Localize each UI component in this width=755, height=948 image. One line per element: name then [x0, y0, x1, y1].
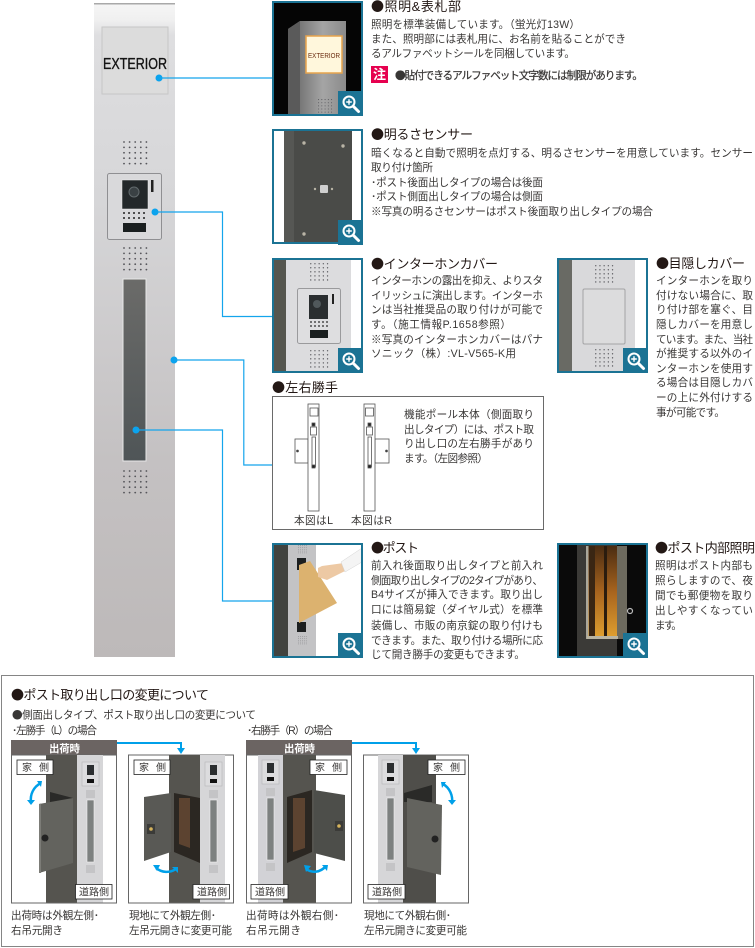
text: intercom cover: イリッシュに演出します。インターホ [371, 289, 543, 302]
text: post internal lighting: 照明はポスト内部も [655, 559, 753, 572]
text: blind cover: が推奨する以外のイ [656, 347, 753, 360]
photo: lighting: EXTERIOR [308, 51, 340, 60]
zoom icon [623, 633, 648, 658]
right-hand label: ･右勝手（R）の場合 [247, 724, 333, 737]
caption: shipping right: 出荷時は外観右側･ [246, 909, 339, 922]
text: lighting: また、照明部には表札用に、お名前を貼ることができ [371, 32, 626, 46]
text: lighting: 照明を標準装備しています。（蛍光灯13W） [371, 18, 580, 31]
text: intercom cover: ンは当社推奨品の取り付けが可能で [371, 303, 543, 316]
text: post internal lighting: 出しやすくなってい [655, 605, 753, 617]
text: brightness sensor [371, 124, 753, 218]
text: intercom cover: ※写真のインターホンカバーはパナ [371, 333, 543, 346]
caption: changed right [364, 909, 467, 937]
icon: swing arrow [443, 784, 452, 803]
mail slot [123, 279, 146, 461]
photo: blind cover [558, 259, 648, 373]
leader: intercom cover [152, 208, 272, 316]
nameplate: EXTERIOR [103, 56, 167, 73]
diagram: shipping left [12, 755, 116, 903]
diagram: R [364, 404, 389, 511]
text: intercom cover: す。（施工情報P.1658参照） [371, 318, 511, 331]
caption: changed left: 現地にて外観左側･ [129, 909, 216, 922]
diagram: shipping left: 道路側 [79, 886, 109, 898]
photo: post [273, 544, 363, 658]
photo: lighting [273, 2, 363, 116]
diagram: changed left: 道路側 [197, 886, 227, 898]
nameplate [102, 27, 168, 94]
text: brightness sensor: ･ポスト後面出しタイプの場合は後面 [371, 176, 543, 189]
text: brightness sensor: ･ポスト側面出しタイプの場合は側面 [371, 190, 543, 203]
header: shipping R [246, 740, 352, 755]
text: post [371, 538, 543, 661]
subheading: ●側面出しタイプ、ポスト取り出し口の変更について [12, 708, 256, 722]
text: lighting [371, 0, 626, 60]
text: blind cover: ンターホンを使用す [656, 362, 753, 375]
text: post: ●ポスト [371, 538, 419, 556]
diagram: L [295, 404, 319, 511]
diagram: shipping right: 道路側 [255, 886, 285, 898]
caption: changed right: 現地にて外観右側･ [364, 909, 451, 922]
diagram: shipping right: 家 側 [315, 761, 342, 774]
panel: changing the post outlet [2, 676, 754, 946]
leader: post [132, 426, 272, 601]
leader: handedness [170, 356, 272, 465]
diagram: changed right [364, 755, 468, 903]
header: shipping L: 出荷時 [49, 742, 80, 755]
text: post: 装備し、市販の南京錠の取り付けも [371, 619, 543, 632]
heading: handedness: ●左右勝手 [272, 377, 338, 396]
arrow: R change [352, 743, 420, 754]
text: post: 口には簡易錠（ダイヤル式）を標準 [371, 603, 543, 616]
header: shipping L [11, 740, 117, 755]
panel: handedness: り出し口の左右勝手があり [404, 437, 534, 450]
text: intercom cover: ソニック（株）:VL-V565-K用 [371, 347, 516, 360]
panel: handedness: 本図はL [294, 514, 333, 527]
pole illustration [94, 3, 175, 657]
caption: shipping right [246, 909, 339, 937]
caption: changed left: 左吊元開きに変更可能 [129, 924, 232, 937]
caption: changed left [129, 909, 232, 937]
text: blind cover: る場合は目隠しカバ [656, 376, 753, 389]
text: blind cover: ーの上に外付けする [656, 391, 753, 404]
text: brightness sensor: 取り付け箇所 [371, 161, 433, 174]
left-hand label: ･左勝手（L）の場合 [12, 724, 97, 737]
caption: shipping left: 右吊元開き [11, 924, 63, 937]
panel: handedness: 本図はR [351, 514, 392, 527]
diagram: shipping left: 家 側 [22, 761, 49, 774]
caption: changed right: 左吊元開きに変更可能 [364, 924, 467, 937]
text: intercom cover [371, 254, 543, 360]
text: brightness sensor: ●明るさセンサー [371, 124, 473, 143]
text: blind cover: 事が可能です。 [656, 406, 725, 419]
note: ●貼付できるアルファベット文字数には制限があります。 [395, 68, 643, 83]
icon: swing arrow [31, 783, 41, 802]
text: post: じて開き勝手の変更もできます。 [371, 648, 525, 661]
text: intercom cover: ●インターホンカバー [371, 254, 498, 272]
text: blind cover: 付けない場合に、取 [656, 289, 753, 302]
text: blind cover: ●目隠しカバー [656, 253, 745, 272]
zoom icon [338, 633, 363, 658]
diagram: changed left: 家 側 [139, 761, 166, 774]
text: post internal lighting [655, 538, 755, 632]
text: post internal lighting: 照らしますので、夜 [655, 575, 753, 587]
text: post internal lighting: 間でも郵便物を取り [655, 589, 753, 602]
text: post internal lighting: ●ポスト内部照明 [655, 538, 755, 556]
text: intercom cover: インターホンの露出を抑え、よりスタ [371, 274, 543, 287]
text: post internal lighting: ます。 [655, 620, 682, 632]
panel: handedness: 出しタイプ）には、ポスト取 [404, 423, 534, 436]
photo: post internal lighting [558, 544, 648, 658]
text: post: 前入れ後面取り出しタイプと前入れ [371, 559, 543, 572]
text: post: 側面取り出しタイプの2タイプがあり、 [371, 574, 543, 587]
text: lighting: るアルファベットシールを同梱しています。 [371, 47, 575, 60]
header: shipping R: 出荷時 [284, 742, 316, 755]
leader: lighting [156, 74, 272, 82]
caption: shipping right: 右吊元開き [246, 924, 301, 937]
heading: ●ポスト取り出し口の変更について [11, 684, 209, 704]
diagram: shipping right [246, 755, 352, 903]
panel: handedness [272, 396, 544, 530]
zoom icon [338, 220, 363, 245]
arrow: L change [117, 743, 185, 754]
note: 注 [373, 67, 386, 82]
text: brightness sensor: 暗くなると自動で照明を点灯する、明るさセンサーを用意しています。センサー [371, 146, 753, 160]
panel: handedness: ます。（左図参照） [404, 452, 488, 465]
text: brightness sensor: ※写真の明るさセンサーはポスト後面取り出しタイプの場合 [371, 205, 653, 218]
diagram: changed right: 家 側 [433, 761, 460, 774]
caption: shipping left [11, 909, 99, 937]
text: blind cover: ています。また、当社 [656, 333, 753, 346]
diagram: changed right: 道路側 [372, 886, 402, 898]
intercom cover [108, 174, 162, 240]
text: blind cover: インターホンを取り [656, 275, 753, 287]
zoom icon [623, 348, 648, 373]
text: post: B4サイズが挿入できます。取り出し [371, 588, 543, 601]
text: blind cover: り付け部を塞ぐ、目 [656, 303, 753, 316]
text: post: できます。また、取り付ける場所に応 [371, 634, 543, 647]
zoom icon [338, 348, 363, 373]
text: blind cover: 隠しカバーを用意し [656, 319, 753, 331]
icon: swing arrow [306, 866, 326, 872]
photo: brightness sensor [273, 130, 363, 245]
panel: handedness: 機能ポール本体（側面取り [404, 408, 534, 421]
photo: intercom cover [273, 259, 363, 373]
caption: shipping left: 出荷時は外観左側･ [11, 909, 99, 922]
zoom icon [338, 91, 363, 116]
text: blind cover [656, 253, 753, 419]
diagram: changed left [128, 755, 234, 903]
icon: swing arrow [156, 868, 176, 872]
